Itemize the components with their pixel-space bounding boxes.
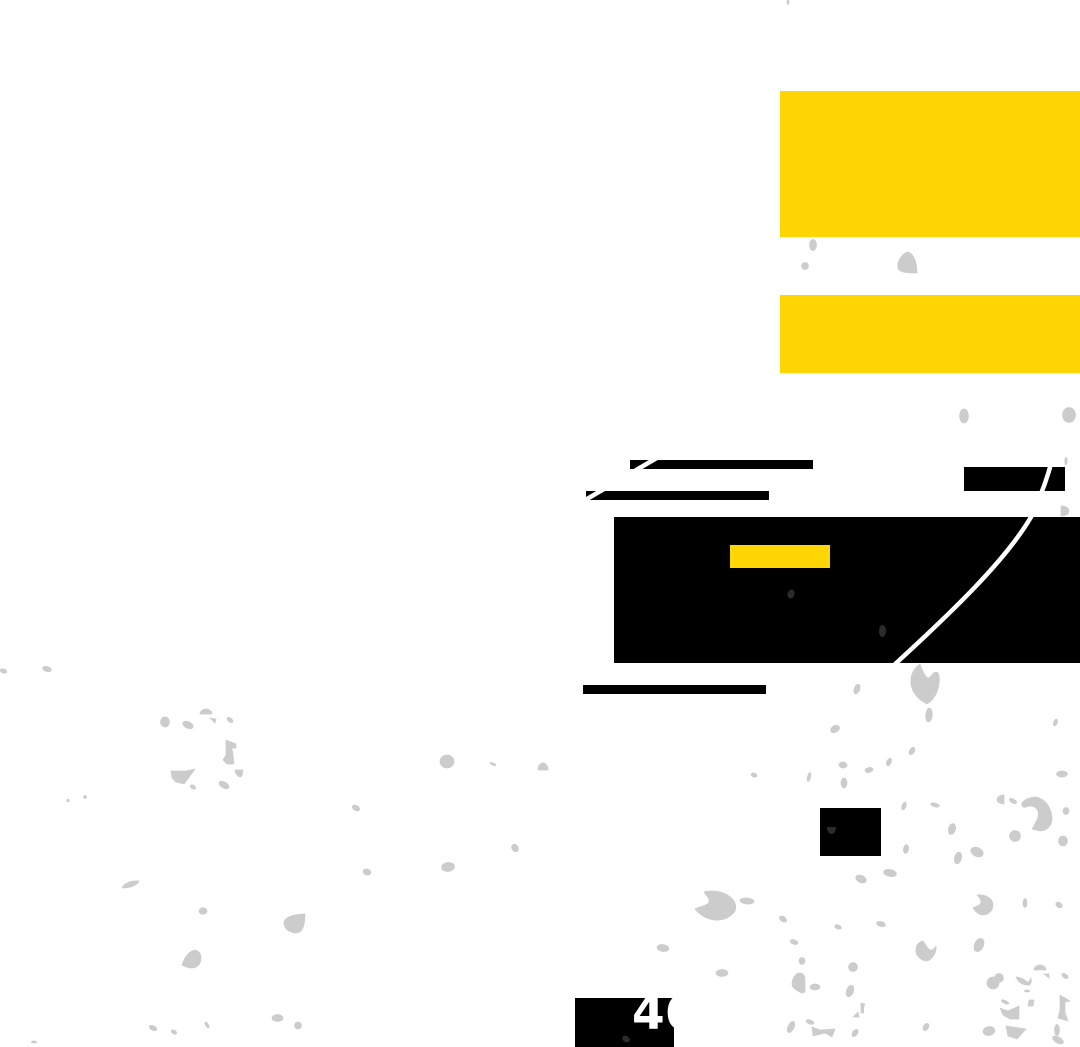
white diagonal across bars: [570, 449, 672, 509]
black bar: upper line: [630, 460, 813, 469]
white curve across block: [893, 460, 1052, 666]
blobs: near yellow blocks: [787, 0, 1076, 516]
black tag with number: [575, 986, 697, 1047]
black tag: right: [964, 467, 1065, 491]
blobs: bottom right scatter: [657, 891, 1070, 1046]
black tag: small square: [820, 808, 881, 856]
blobs: left scatter: [0, 665, 548, 1043]
panel: top yellow block: [780, 91, 1080, 237]
panel: main black block: [614, 517, 1080, 663]
black bar: lower line: [583, 685, 766, 694]
yellow label: [730, 545, 830, 568]
blobs: right middle scatter: [750, 664, 1069, 884]
dark specks: [786, 589, 886, 637]
black bar: second line: [586, 491, 769, 500]
panel: second yellow block: [780, 295, 1080, 373]
number: 46: [632, 986, 697, 1041]
